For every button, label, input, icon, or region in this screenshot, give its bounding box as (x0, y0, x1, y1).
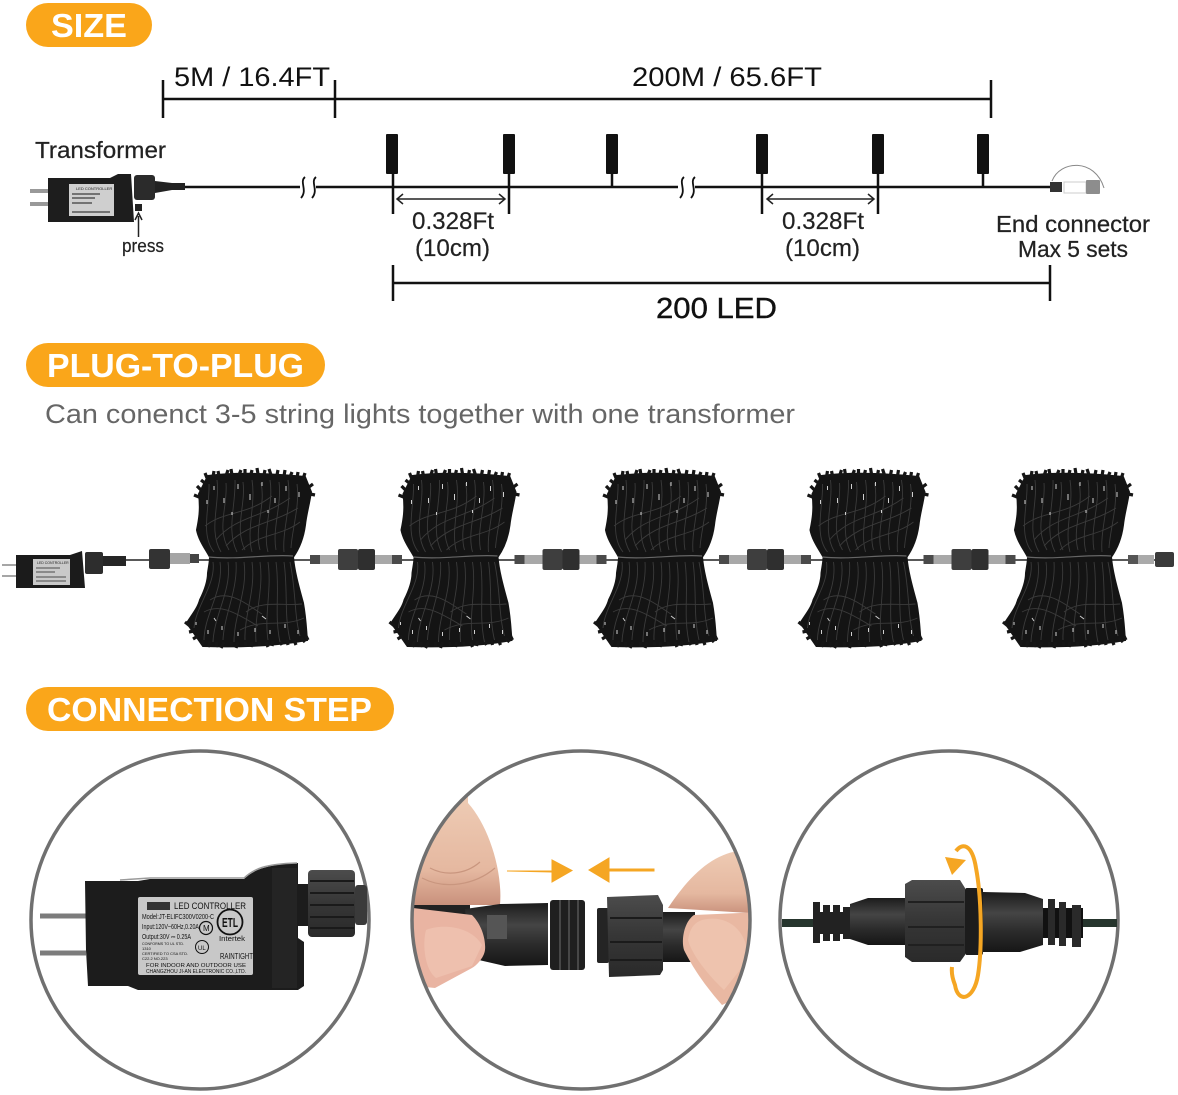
product label: CONFORMS TO UL STD. (142, 941, 184, 946)
left body (850, 898, 905, 945)
description text: Can conenct 3-5 string lights together with one transformer (45, 399, 795, 429)
heading pill: CONNECTION STEP: CONNECTION STEP (47, 691, 372, 728)
left strain relief ridges (813, 902, 850, 943)
arrow: push right (507, 860, 572, 882)
spacing callout: first pair: 0.328Ft (412, 208, 494, 235)
right thumb (682, 912, 748, 1005)
product label: CERTIFIED TO CSA STD. (142, 951, 188, 956)
heading pill: PLUG-TO-PLUG: PLUG-TO-PLUG (47, 347, 304, 384)
connector pair 3 (719, 549, 811, 570)
rotation arrow (945, 846, 981, 997)
light bundle 4 (798, 468, 928, 648)
label: Transformer: Transformer (35, 137, 166, 163)
locked connector (813, 880, 1083, 962)
light bundle 5 (1003, 468, 1133, 648)
connector: nut female half (597, 895, 695, 977)
ring and right body (965, 888, 983, 955)
circle outline (412, 751, 750, 1089)
step 2 circle: joining connectors by hand (405, 751, 765, 1089)
spacing callout: first pair (397, 194, 505, 262)
spacing callout: second pair (767, 194, 874, 262)
end plug connector (1128, 552, 1174, 567)
right thumb nail (688, 919, 748, 990)
label: end connector: End connector (996, 211, 1150, 237)
product label: M (203, 924, 210, 933)
transformer prongs (40, 916, 86, 953)
product label: Model:JT-ELIFC300V0200-C (142, 914, 214, 921)
side panel (272, 868, 297, 988)
product label: LED CONTROLLER (174, 901, 246, 911)
label: end connector (996, 211, 1150, 262)
label: end connector: Max 5 sets (1018, 236, 1128, 262)
light bundle 1 (185, 468, 315, 648)
section: size (26, 3, 1150, 325)
circle fill (412, 751, 750, 1089)
connector: threaded male half (465, 900, 585, 970)
step 3 circle: screw connectors tight (780, 751, 1118, 1089)
left cable grip (414, 905, 470, 914)
transformer body (85, 863, 304, 990)
product label: Input:120V~60Hz,0.20A (142, 924, 199, 931)
product label: FOR INDOOR AND OUTDOOR USE (146, 963, 246, 969)
dimension line: 200 LED: 200 LED (656, 293, 777, 325)
threaded nut (905, 880, 965, 962)
connector pair 2 (514, 549, 606, 570)
knuckle crease (422, 862, 495, 885)
arrow: push left (589, 858, 654, 882)
circle fill and outline (780, 751, 1118, 1089)
spacing callout: first pair: (10cm) (415, 235, 490, 262)
press button indicator (122, 204, 164, 256)
icon: small transformer (30, 174, 185, 222)
heading pill: SIZE (26, 3, 152, 47)
main cable across the row (126, 559, 1165, 561)
left thumb (414, 908, 486, 988)
left thumb nail (424, 927, 482, 978)
icon: small transformer: LED CONTROLLER (76, 186, 112, 191)
dimension line: 200 LED (393, 265, 1050, 325)
press button indicator: press (122, 236, 164, 256)
right strain relief ridges (1043, 908, 1083, 938)
threaded nut (298, 870, 367, 937)
product label: CHANGZHOU JI-AN ELECTRONIC CO.,LTD. (146, 969, 246, 975)
spacing callout: second pair: 0.328Ft (782, 208, 864, 235)
icon: row transformer: LED CONTROLLER (37, 561, 69, 565)
spacing callout: second pair: (10cm) (785, 235, 860, 262)
light string cable with LEDs (185, 134, 1050, 214)
first plug connector (149, 549, 199, 569)
light bundle 3 (594, 468, 724, 648)
connector pair 1 (310, 549, 402, 570)
product label: Intertek (219, 936, 246, 943)
left index finger (414, 796, 500, 905)
connector pair 4 (924, 549, 1016, 570)
product label: C22.2 NO.223 (142, 956, 168, 961)
section: plug-to-plug (2, 343, 1174, 648)
light bundle 2 (390, 468, 520, 648)
icon: end connector (1050, 165, 1104, 194)
product label: UL (198, 946, 206, 952)
step 1 circle: transformer close-up (31, 751, 369, 1089)
hands and connector artwork (405, 790, 765, 1005)
product label (138, 897, 253, 975)
product label: Output:30V ⎓ 0.25A (142, 934, 191, 941)
section: connection step (26, 687, 1118, 1089)
right index finger (668, 852, 748, 913)
cable, left and right (782, 919, 1117, 927)
heading pill: SIZE: SIZE (51, 7, 127, 44)
circle outline (31, 751, 369, 1089)
dimension line: cable lengths: 5M / 16.4FT (174, 62, 330, 92)
product label: ETL (222, 915, 238, 930)
dimension line: cable lengths: 200M / 65.6FT (632, 62, 822, 92)
top edge highlight (120, 863, 297, 880)
product label: 1310 (142, 946, 152, 951)
dimension line: cable lengths (163, 62, 991, 118)
product label: RAINTIGHT (220, 952, 253, 961)
icon: row transformer (2, 551, 126, 588)
